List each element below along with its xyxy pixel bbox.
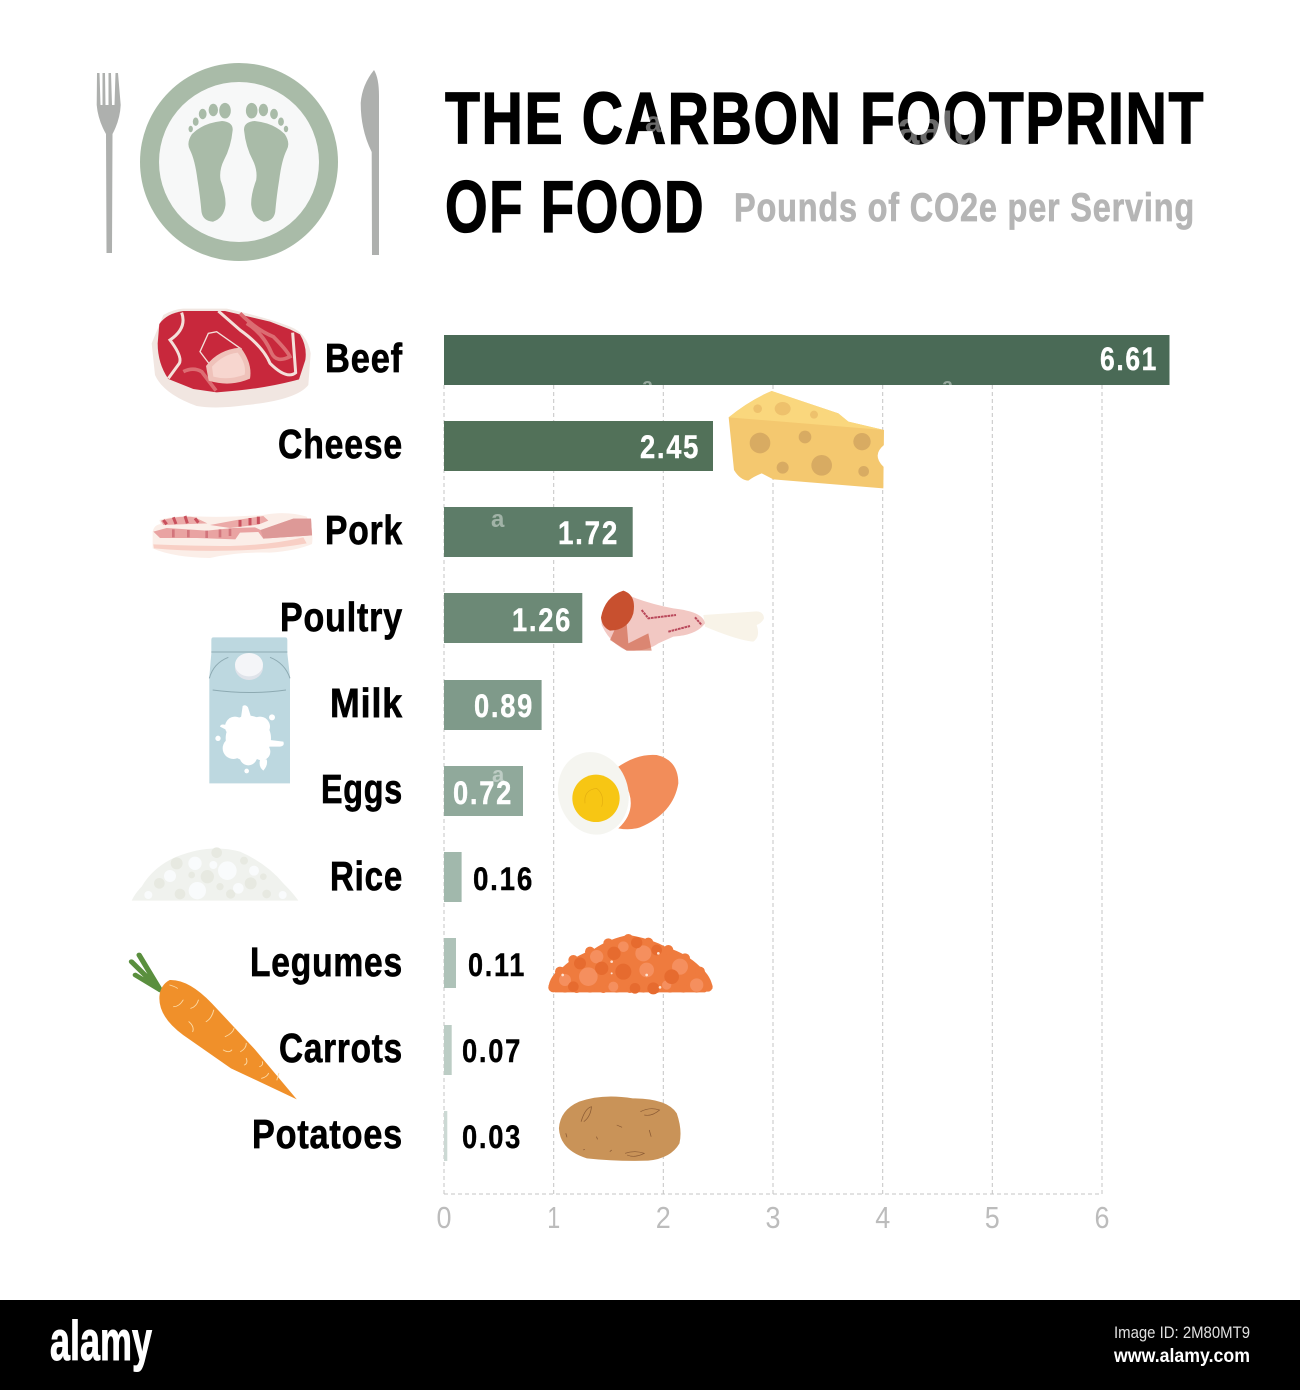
icon: right footprint — [244, 103, 288, 222]
icon: bacon — [153, 513, 312, 558]
bar: carrots — [444, 1025, 452, 1075]
bar: pork — [444, 507, 633, 557]
axis tick labels — [436, 1200, 1110, 1235]
axis tick labels: 1 — [547, 1200, 560, 1235]
axis tick labels: 3 — [766, 1200, 780, 1235]
bar chart — [444, 335, 1170, 1161]
watermark fragments: a — [491, 506, 505, 533]
label: milk: Milk — [330, 680, 403, 726]
icon: rice pile — [132, 847, 298, 901]
footer bar — [0, 1300, 1300, 1390]
icon: plate with footprints and cutlery — [97, 63, 379, 261]
bar: milk — [444, 680, 542, 730]
icon: milk carton — [209, 637, 290, 783]
icon: lentil pile — [548, 934, 713, 994]
label: rice: Rice — [330, 853, 403, 899]
bar: beef — [444, 335, 1170, 385]
axis tick labels: 0 — [436, 1200, 452, 1235]
label: pork: Pork — [325, 507, 403, 553]
icon: potato — [559, 1096, 681, 1161]
icon: left footprint — [188, 103, 233, 222]
watermark fragments: a — [645, 106, 662, 139]
watermark fragments: a — [642, 375, 654, 397]
footer url: www.alamy.com — [1113, 1346, 1250, 1367]
watermark fragments — [491, 102, 1000, 787]
value: potatoes: 0.03 — [462, 1119, 522, 1155]
image id: Image ID: 2M80MT9 — [1114, 1323, 1250, 1342]
chart grid and axis — [436, 385, 1110, 1235]
axis tick labels: 4 — [875, 1200, 890, 1235]
icon: boiled egg — [549, 744, 678, 843]
icon: chicken drumstick — [601, 591, 764, 651]
icon: plate rim — [140, 63, 338, 261]
watermark fragments: aalu l — [897, 102, 1000, 154]
subtitle: Pounds of CO2e per Serving — [734, 186, 1195, 230]
watermark fragments: a — [942, 375, 954, 397]
bar: rice — [444, 852, 462, 902]
watermark fragments: a — [492, 762, 505, 787]
bar: potatoes — [444, 1111, 447, 1161]
label: poultry: Poultry — [280, 594, 403, 640]
value: carrots: 0.07 — [462, 1033, 522, 1069]
label: potatoes: Potatoes — [252, 1111, 403, 1157]
label: carrots: Carrots — [279, 1025, 403, 1071]
value: rice: 0.16 — [473, 861, 534, 897]
bar: legumes — [444, 938, 456, 988]
title: OF FOOD — [445, 167, 705, 248]
icon: cheese wedge — [729, 391, 887, 488]
icon: plate centre — [159, 82, 319, 242]
value: pork: 1.72 — [558, 515, 619, 551]
category labels — [250, 335, 403, 1157]
value: legumes: 0.11 — [468, 947, 526, 983]
icon: knife — [361, 70, 379, 255]
bar values — [453, 341, 1158, 1155]
icon: fork — [97, 73, 121, 253]
label: cheese: Cheese — [278, 421, 403, 467]
label: beef: Beef — [325, 335, 403, 381]
icon: carrot — [131, 955, 297, 1099]
label: legumes: Legumes — [250, 939, 403, 985]
value: eggs: 0.72 — [453, 775, 513, 811]
axis tick labels: 6 — [1094, 1200, 1110, 1235]
axis tick labels: 5 — [985, 1200, 1000, 1235]
bar: eggs — [444, 766, 523, 816]
value: cheese: 2.45 — [640, 429, 700, 465]
value: beef: 6.61 — [1100, 341, 1158, 377]
alamy logo: alamy — [50, 1309, 152, 1372]
value: milk: 0.89 — [474, 688, 534, 724]
bar: poultry — [444, 593, 582, 643]
axis tick labels: 2 — [656, 1200, 671, 1235]
bar: cheese — [444, 421, 713, 471]
icon: beef steak — [152, 309, 311, 407]
title — [445, 78, 1205, 248]
label: eggs: Eggs — [321, 766, 403, 812]
value: poultry: 1.26 — [512, 602, 572, 638]
